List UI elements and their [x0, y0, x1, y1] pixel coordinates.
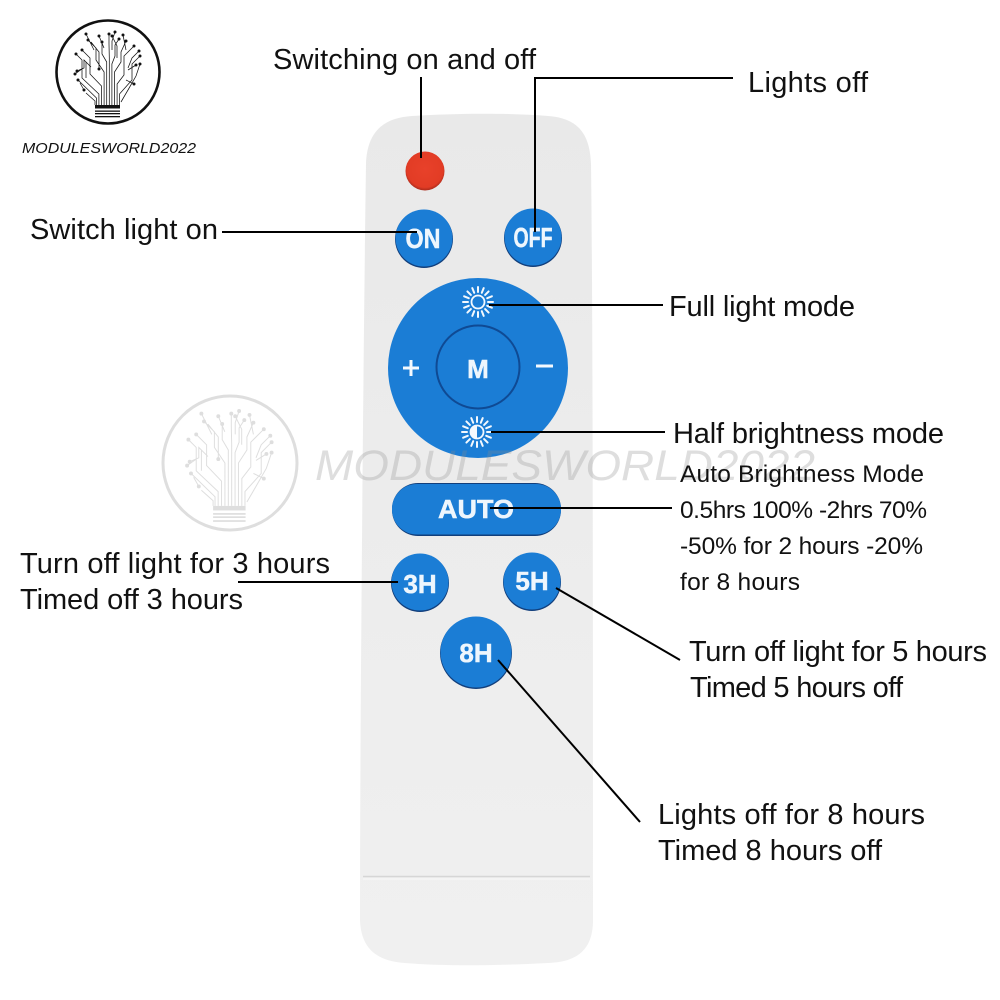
- OFF button: [504, 208, 562, 267]
- label: full light mode: Full light mode: [669, 291, 855, 323]
- M label: M: [467, 354, 489, 384]
- label: 5 hours timer: [689, 636, 987, 704]
- 5H button: [503, 552, 561, 611]
- label: auto brightness mode: for 8 hours: [680, 569, 800, 596]
- label: 8 hours timer: [658, 799, 925, 867]
- OFF button: OFF: [514, 222, 552, 253]
- label: 3 hours timer: Turn off light for 3 hours: [20, 548, 330, 580]
- ON button: [395, 210, 453, 268]
- label: 5 hours timer: Turn off light for 5 hours: [689, 636, 987, 668]
- label: switch light on: Switch light on: [30, 214, 218, 246]
- 8H button: [440, 616, 512, 689]
- brand logo: MODULESWORLD2022: [22, 140, 197, 157]
- watermark text: MODULESWORLD2022: [315, 442, 815, 490]
- AUTO button: [392, 483, 561, 536]
- label: switching on and off: Switching on and off: [273, 44, 537, 76]
- label: 3 hours timer: Timed off 3 hours: [20, 584, 243, 616]
- label: 8 hours timer: Lights off for 8 hours: [658, 799, 925, 831]
- watermark logo: [163, 396, 297, 530]
- remote control body: [360, 114, 593, 965]
- brand logo: [22, 20, 197, 157]
- icon: full brightness sun: [463, 287, 493, 317]
- label: 3 hours timer: [20, 548, 330, 616]
- label: auto brightness mode: [680, 461, 927, 596]
- label: 8 hours timer: Timed 8 hours off: [658, 835, 883, 867]
- ON button: ON: [406, 223, 440, 254]
- label: half brightness mode: Half brightness mode: [673, 418, 944, 450]
- icon: half brightness sun: [462, 417, 492, 447]
- mode dial: [388, 278, 568, 458]
- red power button: [406, 152, 444, 190]
- leader lines: [222, 77, 733, 822]
- minus icon: [536, 364, 553, 368]
- AUTO button: AUTO: [438, 494, 514, 524]
- 3H button: [391, 554, 449, 612]
- label: lights off: Lights off: [748, 67, 869, 99]
- label: auto brightness mode: 0.5hrs 100% -2hrs 70%: [680, 497, 927, 524]
- 5H button: 5H: [515, 566, 549, 596]
- label: 5 hours timer: Timed 5 hours off: [690, 672, 904, 704]
- 8H button: 8H: [459, 638, 493, 668]
- plus icon: [403, 360, 419, 376]
- label: auto brightness mode: -50% for 2 hours -20%: [680, 533, 923, 560]
- 3H button: 3H: [403, 569, 437, 599]
- label: auto brightness mode: Auto Brightness Mode: [680, 461, 924, 488]
